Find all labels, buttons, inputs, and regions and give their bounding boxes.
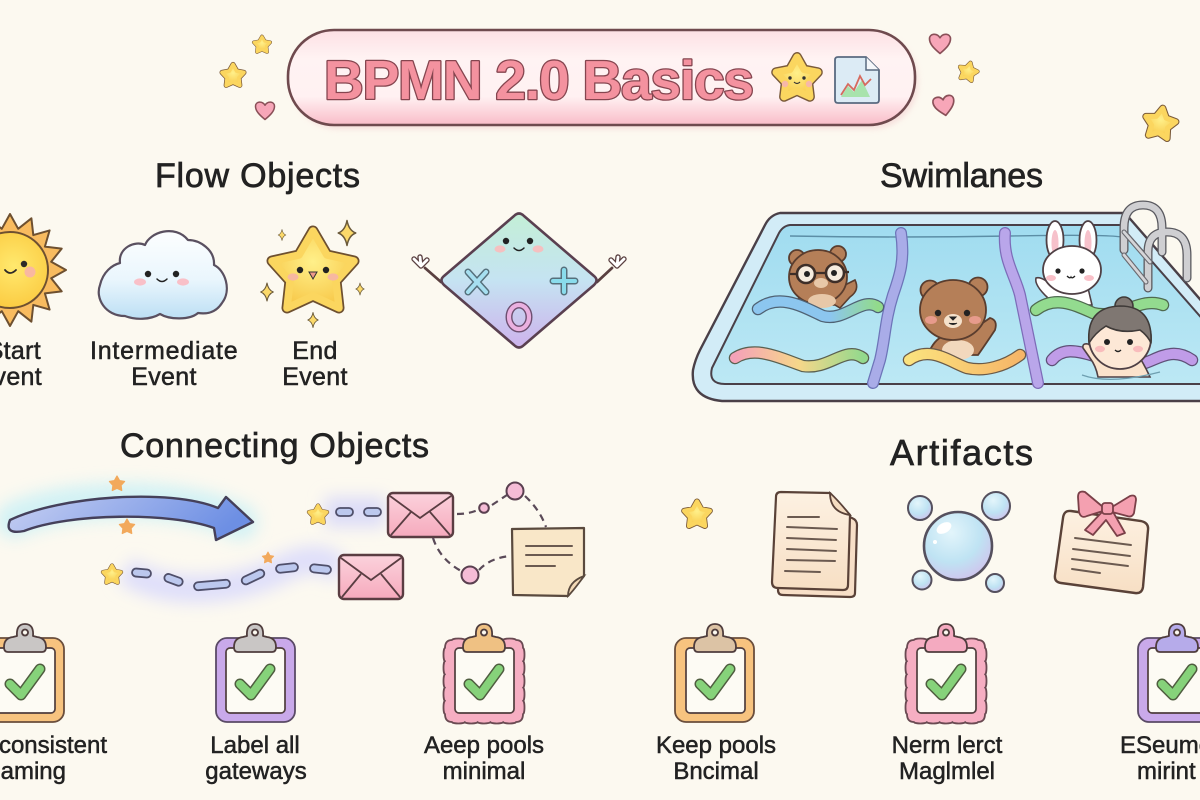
icon: bubble group [908,492,1010,592]
decorations around title [222,34,1178,139]
noodle purple [1052,351,1192,365]
association dashed lines [433,495,546,572]
icon: sparkles around star [261,220,364,328]
icon: sticky note [512,528,584,596]
label: Nerm lerct: Nerm lerct [892,732,1003,759]
lane divider right [1005,233,1038,383]
label: Label all: Label all [210,732,300,759]
noodle blue green [758,301,878,317]
icon: envelope lower [339,555,403,599]
bear with glasses [789,246,857,308]
small star lower flow [262,552,274,563]
noodle yellow orange [909,354,1020,369]
label: Bncimal: Bncimal [673,758,759,785]
label: End Event second line: Event [282,363,348,391]
noodle pink green [735,352,863,366]
title banner [288,30,918,129]
icon: note with bow [1055,492,1148,593]
dashes upper message flow [336,508,381,516]
star top right [1143,106,1178,139]
glow behind message flow lower [125,560,340,589]
clipboard 3 [444,624,524,724]
pool rim [693,213,1200,401]
association nodes [462,482,524,584]
star decoration left [222,64,244,85]
panel: artifacts [684,492,1148,597]
clipboard 5 [906,624,986,724]
icon: smiling star in title [776,57,818,97]
title text: BPMN 2.0 Basics [324,49,754,111]
clipboard 2 [216,624,295,722]
star decoration right [957,60,979,82]
heart decoration [256,102,274,120]
heading: Swimlanes: Swimlanes [880,157,1043,195]
clipboard 4 [675,624,754,722]
heading: Artifacts: Artifacts [890,432,1033,473]
label: Intermediate Event: Intermediate [90,337,238,365]
heading: Connecting Objects: Connecting Objects [120,427,429,465]
glow behind sequence arrow [14,501,240,522]
label: minimal: minimal [443,758,525,785]
brown bear swimmer [920,278,996,360]
heart decoration lower right [932,95,956,117]
stars on sequence flow [109,476,135,533]
label: consistent naming: consistent [0,732,107,759]
icon: data object document [772,492,857,597]
icon: envelope upper [388,493,453,537]
star at message flow upper [309,506,327,523]
pool ladder [1124,205,1187,288]
icon: star end event [272,231,354,308]
icon: document with chart [835,57,879,103]
label: Keep pools: Keep pools [656,732,776,759]
icon: cloud intermediate event [99,231,227,319]
label: naming: aming [1,758,66,785]
heading: Flow Objects: Flow Objects [155,157,360,195]
panel: best practices checklist [0,624,1200,785]
clipboard 6 [1138,624,1200,722]
girl swimmer [1082,297,1160,379]
chart: swimming pool with lanes [693,205,1200,401]
lane divider left [873,233,902,383]
label: Maglmlel: Maglmlel [899,758,995,785]
bunny swimmer [1036,221,1101,305]
pool water [711,225,1200,384]
arrow: sequence flow [9,497,253,540]
noodle green [1036,302,1163,314]
label: gateways: gateways [205,758,307,785]
heart decoration right [930,34,950,54]
glow behind message flow upper [325,497,385,527]
label: Intermediate Event second line: Event [131,363,197,391]
label: Aeep pools: Aeep pools [424,732,544,759]
panel: connecting objects [9,476,584,599]
label: mirint: mirint [1137,758,1196,785]
icon: sun start event [0,214,66,326]
panel: flow objects [0,214,624,391]
label: End Event: End [292,337,338,365]
dashes lower message flow [132,563,331,591]
star at message flow lower [103,566,121,583]
clipboard 1 [0,624,64,722]
star decoration in artifacts [684,502,710,526]
icon: gateway diamond [414,214,624,348]
star decoration [254,36,270,52]
